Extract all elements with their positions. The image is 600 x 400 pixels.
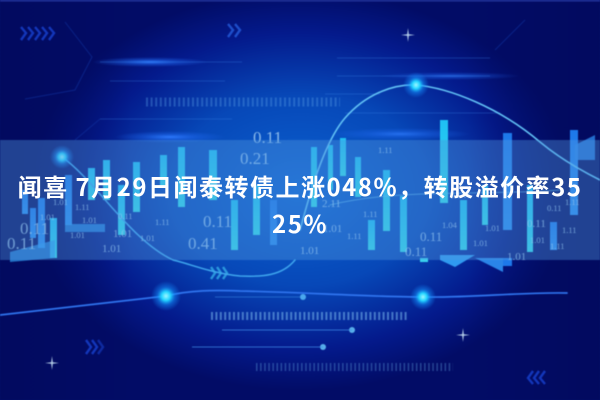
chart number labels: 1.11 [75,202,90,212]
bar chart [10,120,595,272]
chart number labels: 0.11 [253,128,282,147]
chart number labels: 0.11 [203,212,232,231]
title: 25% [272,205,328,240]
chart number labels: 2.11 [322,198,341,210]
chart number labels: 1.11 [363,209,378,219]
sparkle stars [45,28,470,370]
chart number labels: 1.01 [530,235,545,245]
horizontal light streaks [25,20,525,143]
chart number labels: 1.01 [473,238,488,248]
trend curves [0,85,600,315]
chart number labels: 1.01 [102,243,121,255]
chart number labels: 1.01 [113,228,132,240]
chart number labels: 0.11 [7,234,36,253]
chart number labels: 1.11 [550,241,565,251]
title [18,168,582,240]
chart number labels: 0.1.11 [450,190,471,200]
chart number labels: 0.11 [527,218,546,230]
chart number labels: 0.11 [547,203,562,213]
chart number labels: 1.04 [442,220,458,230]
chart number labels: 1.11 [565,197,580,207]
chart number labels: 1.11 [562,225,577,235]
chart number labels: 1.11 [347,231,362,241]
chart number labels: 0.41 [188,234,218,253]
chart number labels [7,128,580,263]
chart number labels: 1.01 [82,215,97,225]
chart number labels: 0.21 [240,149,270,168]
chart number labels: 1.01 [323,223,342,235]
chart number labels: 1.01 [507,251,526,263]
title: 闻喜 7月29日闻泰转债上涨048%，转股溢价率35 [18,168,582,203]
chart number labels: 1.01 [485,223,500,233]
chart number labels: 1.01 [40,212,55,222]
chart number labels: 0.11 [118,211,133,221]
chart number labels: 1.01 [70,230,85,240]
translucent title band [0,140,600,260]
lower data rows and leader lines [192,297,453,367]
chart number labels: 0.11 [420,229,442,244]
top dotted data row [146,98,340,106]
chart number labels: 1.11 [155,217,170,227]
chart number labels: 0.11 [20,219,49,238]
chart number labels: 1.01 [140,233,155,243]
chevron icons [21,24,545,384]
glowing nodes [50,72,436,350]
chart number labels: 1.01 [300,245,319,257]
chart number labels: 0.11 [405,244,427,259]
chart number labels: 1.11 [378,145,393,155]
chart number labels: 1.01 [53,197,68,207]
